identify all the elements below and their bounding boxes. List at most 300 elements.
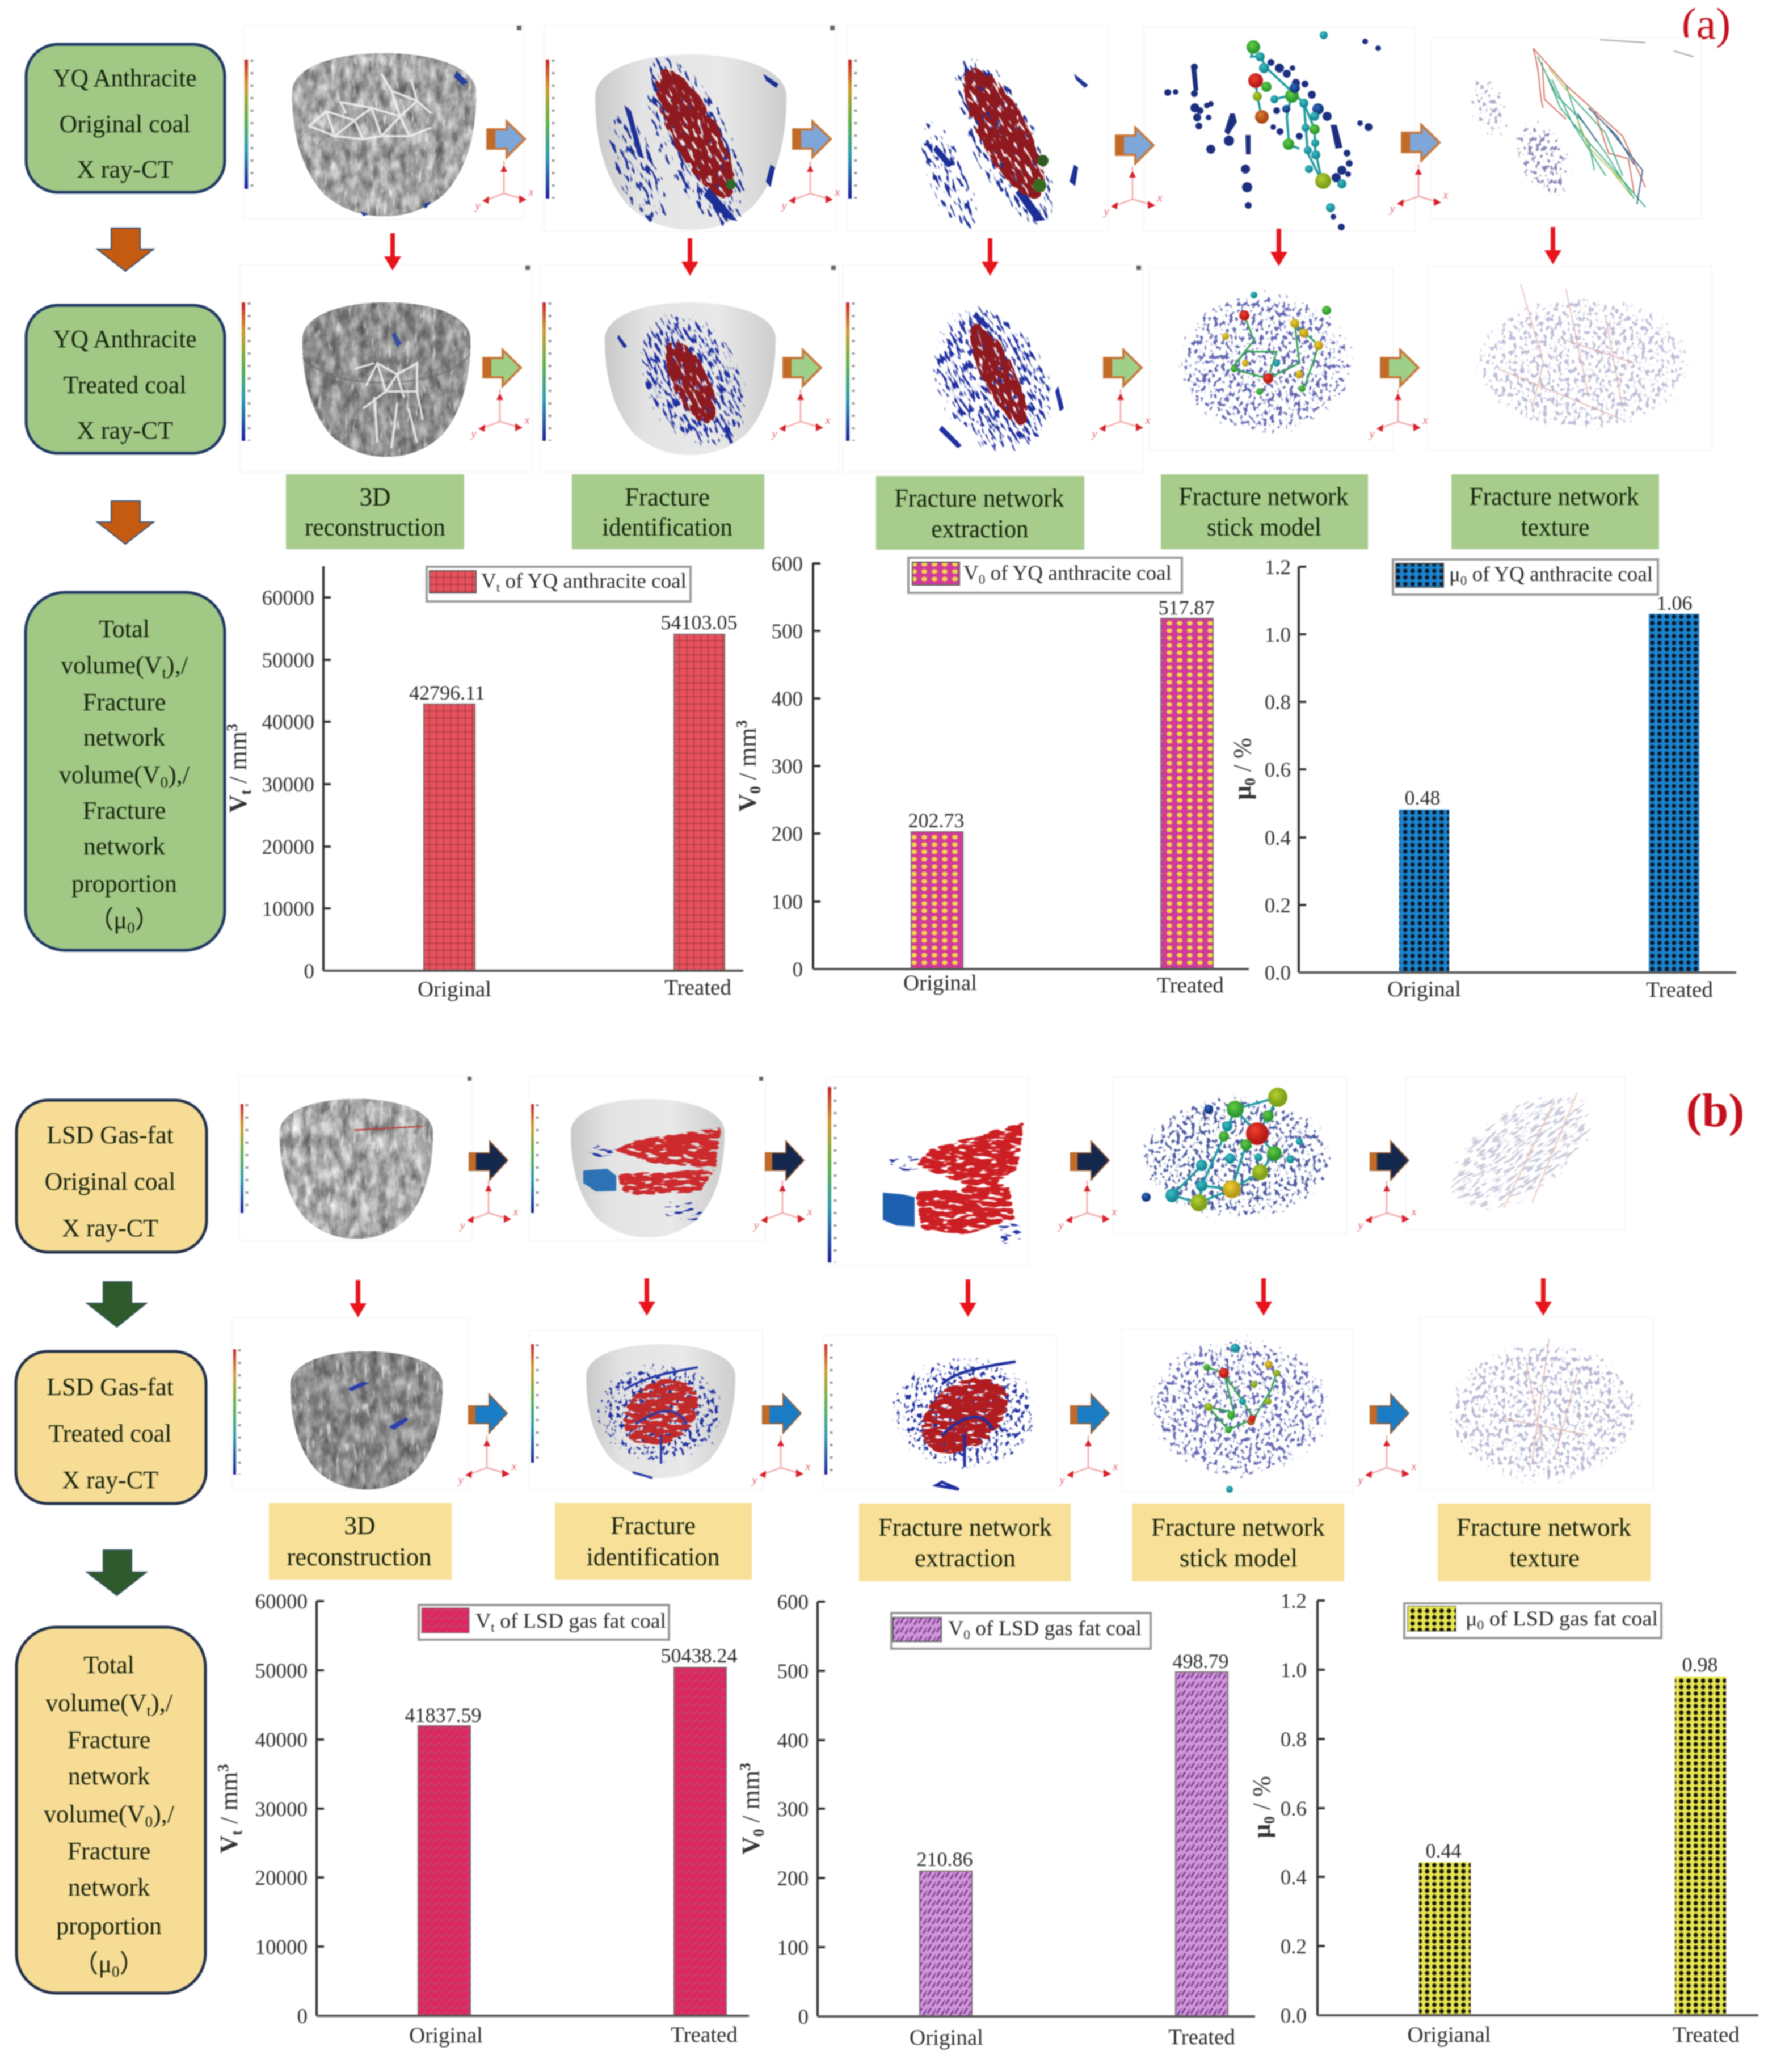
axis title: 0 bbox=[1241, 778, 1258, 786]
arrow: to texture bbox=[1402, 125, 1439, 161]
box: YQ anthracite treated coal: X ray-CT bbox=[77, 416, 173, 444]
legend: V bbox=[475, 1610, 491, 1633]
step label: fracture identification: identification bbox=[587, 1543, 719, 1571]
bar chart: mu0 of LSD gas fat coal: 0.2 bbox=[1281, 1935, 1307, 1959]
step label: fracture identification: Fracture bbox=[611, 1511, 696, 1540]
box: measured parameters: ） bbox=[135, 906, 160, 934]
arrow: flow down to parameters box bbox=[97, 501, 154, 544]
axis triad: x bbox=[825, 414, 831, 427]
axis triad bbox=[457, 1435, 517, 1486]
box: YQ anthracite treated coal: Treated coal bbox=[63, 371, 187, 399]
axis triad: x bbox=[528, 186, 534, 199]
bar chart: Vt of LSD gas fat coal: 30000 bbox=[255, 1798, 308, 1821]
box: LSD gas-fat original coal: Original coal bbox=[45, 1168, 175, 1195]
bar chart: Vt of YQ anthracite coal: Original bbox=[418, 977, 491, 1001]
bar chart: V0 of YQ anthracite coal: 200 bbox=[772, 823, 803, 846]
bar chart: V0 of YQ anthracite coal: 500 bbox=[772, 620, 803, 643]
red arrow: texture bbox=[1544, 227, 1561, 264]
box: measured parameters: t bbox=[146, 1702, 151, 1719]
panel label (a): (a) bbox=[1682, 0, 1731, 48]
axis triad: x bbox=[1112, 1206, 1117, 1218]
image: treated fracture network extraction bbox=[843, 264, 1143, 481]
step label: 3D reconstruction: reconstruction bbox=[287, 1543, 431, 1571]
axis triad bbox=[1059, 1435, 1118, 1486]
arrow: to stick model bbox=[1071, 1141, 1109, 1180]
legend: of LSD gas fat coal bbox=[495, 1610, 666, 1633]
image: original fracture identification bbox=[544, 26, 836, 246]
bar chart: V0 of YQ anthracite coal: 202.73 bbox=[908, 809, 965, 832]
axis triad bbox=[1103, 167, 1163, 218]
axis triad bbox=[474, 161, 534, 212]
axis title: 3 bbox=[736, 1763, 753, 1771]
axis triad: y bbox=[753, 1219, 759, 1232]
bar chart: V0 of YQ anthracite coal: 100 bbox=[772, 891, 803, 914]
bar chart: V0 of YQ anthracite coal: 0 bbox=[792, 958, 803, 982]
arrow: to fracture identification bbox=[469, 1141, 508, 1180]
box: measured parameters bbox=[16, 1627, 205, 1993]
axis triad: y bbox=[781, 200, 787, 212]
axis triad: x bbox=[1113, 1460, 1118, 1473]
axis triad: x bbox=[513, 1206, 519, 1218]
box: measured parameters: （μ bbox=[73, 1950, 112, 1978]
bar chart: Vt of YQ anthracite coal: Treated bbox=[664, 975, 731, 1000]
step label: network extraction: extraction bbox=[932, 515, 1028, 543]
axis title: 0 bbox=[750, 1829, 767, 1837]
bar chart: V0 of LSD gas fat coal: 400 bbox=[777, 1729, 809, 1753]
box: LSD gas-fat treated coal bbox=[16, 1351, 206, 1504]
bar chart: Vt of LSD gas fat coal: 50000 bbox=[255, 1660, 308, 1683]
box: measured parameters: 0 bbox=[160, 774, 168, 791]
bar chart: Vt of YQ anthracite coal: 50000 bbox=[262, 649, 314, 672]
axis title: 3 bbox=[224, 723, 241, 731]
axis triad: y bbox=[1357, 1219, 1363, 1232]
arrow: to fracture identification bbox=[487, 121, 525, 157]
axis triad: y bbox=[751, 1474, 757, 1486]
axis triad: x bbox=[805, 1460, 811, 1473]
box: measured parameters bbox=[26, 592, 225, 950]
arrow: flow down to treated box bbox=[87, 1282, 146, 1327]
legend bbox=[1404, 1603, 1661, 1638]
bar chart: Vt of YQ anthracite coal bbox=[224, 566, 743, 1001]
bar chart: Vt of LSD gas fat coal: 60000 bbox=[255, 1590, 308, 1614]
box: measured parameters: proportion bbox=[56, 1912, 162, 1940]
bar chart: mu0 of YQ anthracite coal: 0.2 bbox=[1265, 894, 1291, 917]
bar chart: mu0 of LSD gas fat coal: 1.0 bbox=[1281, 1659, 1307, 1682]
legend bbox=[891, 1613, 1151, 1649]
step label: network stick model: Fracture network bbox=[1179, 482, 1349, 511]
legend: V bbox=[948, 1617, 963, 1640]
legend: 0 bbox=[1477, 1618, 1484, 1632]
box: measured parameters: Fracture bbox=[83, 688, 166, 716]
bar chart: V0 of YQ anthracite coal: 517.87 bbox=[1159, 596, 1214, 619]
axis title: / mm bbox=[215, 1772, 243, 1830]
bar: treated bbox=[1176, 1672, 1228, 2016]
panel (b): LSD gas-fat coal bbox=[16, 1062, 1758, 2050]
box: measured parameters: t bbox=[162, 664, 166, 681]
axis triad: y bbox=[474, 200, 481, 212]
legend bbox=[427, 567, 691, 601]
axis title: / % bbox=[1248, 1776, 1275, 1816]
axis triad: y bbox=[1357, 1474, 1363, 1486]
step label: network texture: Fracture network bbox=[1470, 482, 1639, 511]
axis triad bbox=[1357, 1435, 1417, 1486]
red arrow: network extraction bbox=[982, 238, 999, 276]
box: YQ anthracite original coal: Original coal bbox=[60, 110, 190, 138]
step label: network texture: texture bbox=[1509, 1544, 1580, 1572]
legend: 0 bbox=[979, 572, 985, 587]
axis triad: y bbox=[1369, 428, 1375, 440]
box: YQ anthracite original coal: YQ Anthracite bbox=[53, 64, 196, 92]
bar chart: mu0 of LSD gas fat coal: 1.2 bbox=[1281, 1590, 1307, 1613]
step label: fracture identification: identification bbox=[602, 513, 732, 541]
bar chart: mu0 of YQ anthracite coal: Original bbox=[1387, 977, 1461, 1001]
image: treated fracture network extraction bbox=[823, 1336, 1056, 1490]
legend: of LSD gas fat coal bbox=[970, 1617, 1142, 1640]
arrow: to network extraction bbox=[763, 1394, 801, 1433]
bar chart: mu0 of YQ anthracite coal: 0.48 bbox=[1405, 786, 1440, 809]
box: LSD gas-fat original coal: LSD Gas-fat bbox=[47, 1121, 174, 1149]
bar chart: Vt of YQ anthracite coal: 40000 bbox=[262, 711, 314, 734]
axis title: V bbox=[215, 1835, 243, 1854]
bar chart: mu0 of YQ anthracite coal: 0.0 bbox=[1265, 962, 1291, 985]
axis title: 3 bbox=[214, 1764, 231, 1772]
bar chart: Vt of YQ anthracite coal: 54103.05 bbox=[660, 611, 738, 634]
axis triad: y bbox=[771, 428, 777, 440]
bar chart: Vt of YQ anthracite coal: 10000 bbox=[262, 898, 314, 921]
bar chart: mu0 of LSD gas fat coal: Origianal bbox=[1407, 2023, 1491, 2047]
bar chart: mu0 of YQ anthracite coal: 0.4 bbox=[1265, 827, 1291, 850]
box: measured parameters: ),/ bbox=[166, 651, 188, 679]
axis triad bbox=[470, 389, 530, 440]
step label: 3D reconstruction: 3D bbox=[360, 483, 390, 511]
arrow: to texture bbox=[1370, 1141, 1409, 1180]
bar chart: mu0 of LSD gas fat coal: 0.8 bbox=[1281, 1728, 1307, 1751]
panel label (b): (b) bbox=[1686, 1084, 1744, 1137]
axis title: V bbox=[734, 794, 761, 812]
axis triad: x bbox=[1443, 189, 1449, 201]
image: original 3D reconstruction bbox=[239, 1076, 472, 1240]
step label: network stick model: Fracture network bbox=[1151, 1513, 1325, 1542]
axis triad: y bbox=[1059, 1474, 1065, 1486]
panel (a): YQ anthracite coal bbox=[26, 0, 1736, 1002]
legend bbox=[908, 558, 1182, 593]
image: treated fracture identification bbox=[529, 1330, 763, 1490]
image: treated fracture identification bbox=[540, 264, 839, 473]
bar: treated bbox=[1161, 618, 1213, 969]
axis triad: y bbox=[459, 1219, 465, 1232]
axis title: V bbox=[224, 795, 252, 813]
bar chart: Vt of YQ anthracite coal: 60000 bbox=[262, 587, 314, 610]
axis triad bbox=[771, 389, 831, 440]
bar chart: V0 of LSD gas fat coal: 500 bbox=[777, 1660, 809, 1683]
box: LSD gas-fat treated coal: X ray-CT bbox=[62, 1466, 158, 1494]
bar chart: mu0 of LSD gas fat coal: 0.6 bbox=[1281, 1797, 1307, 1821]
step label: fracture identification bbox=[572, 474, 764, 549]
image: treated fracture network texture bbox=[1420, 1317, 1653, 1490]
axis title: V bbox=[737, 1837, 765, 1855]
red arrow: 3D reconstruction bbox=[350, 1280, 367, 1317]
bar chart: Vt of YQ anthracite coal: 20000 bbox=[262, 836, 314, 859]
axis triad: x bbox=[511, 1460, 517, 1473]
arrow: to fracture identification bbox=[469, 1394, 507, 1433]
axis title: μ bbox=[1228, 786, 1256, 800]
box: measured parameters: ） bbox=[120, 1950, 145, 1978]
bar chart: V0 of LSD gas fat coal bbox=[736, 1591, 1255, 2050]
axis title: 0 bbox=[1261, 1816, 1278, 1824]
step label: network extraction bbox=[876, 476, 1084, 550]
arrow: to stick model bbox=[1116, 128, 1153, 163]
axis title: μ bbox=[1248, 1824, 1275, 1838]
box: measured parameters: network bbox=[83, 832, 165, 860]
bar chart: mu0 of LSD gas fat coal: 0.0 bbox=[1281, 2004, 1307, 2028]
bar chart: Vt of LSD gas fat coal: 10000 bbox=[255, 1936, 308, 1959]
step label: network texture: Fracture network bbox=[1456, 1513, 1631, 1542]
bar chart: Vt of LSD gas fat coal bbox=[214, 1590, 749, 2048]
step label: 3D reconstruction: 3D bbox=[344, 1511, 376, 1540]
bar: original bbox=[418, 1726, 470, 2016]
box: measured parameters: proportion bbox=[71, 870, 177, 898]
bar chart: V0 of LSD gas fat coal: 100 bbox=[777, 1936, 809, 1960]
red arrow: stick model bbox=[1270, 229, 1287, 266]
axis triad bbox=[753, 1181, 812, 1232]
box: measured parameters: ),/ bbox=[153, 1800, 175, 1828]
box: measured parameters: volume(V bbox=[44, 1800, 145, 1828]
bar chart: V0 of LSD gas fat coal: Original bbox=[910, 2025, 983, 2050]
box: measured parameters: network bbox=[68, 1762, 150, 1790]
bar chart: mu0 of LSD gas fat coal: 0.4 bbox=[1281, 1866, 1307, 1889]
bar chart: Vt of YQ anthracite coal: 42796.11 bbox=[409, 681, 485, 704]
arrow: flow down to parameters box bbox=[87, 1550, 146, 1595]
legend: of YQ anthracite coal bbox=[1467, 563, 1653, 586]
axis title: t bbox=[237, 790, 254, 795]
bar chart: Vt of YQ anthracite coal: 0 bbox=[304, 960, 314, 983]
box: YQ anthracite original coal bbox=[26, 44, 225, 192]
step label: network extraction: Fracture network bbox=[878, 1513, 1052, 1542]
axis triad: x bbox=[1411, 1206, 1417, 1218]
legend: μ bbox=[1466, 1607, 1477, 1631]
image: original fracture network extraction bbox=[847, 26, 1108, 245]
box: measured parameters: Total bbox=[99, 615, 150, 643]
bar: original bbox=[920, 1871, 972, 2016]
arrow: to fracture identification bbox=[483, 350, 521, 386]
box: measured parameters: volume(V bbox=[61, 651, 162, 679]
bar chart: mu0 of YQ anthracite coal: 1.0 bbox=[1265, 624, 1291, 647]
axis title: / % bbox=[1228, 738, 1256, 778]
step label: network texture bbox=[1451, 474, 1659, 549]
axis triad bbox=[751, 1435, 811, 1486]
image: treated fracture network stick model bbox=[1122, 1329, 1353, 1493]
axis triad: y bbox=[1091, 428, 1097, 440]
red arrow: fracture identification bbox=[638, 1278, 655, 1316]
bar chart: V0 of LSD gas fat coal: 0 bbox=[798, 2006, 809, 2029]
arrow: flow down to treated box bbox=[97, 228, 154, 271]
image: original fracture network texture bbox=[1406, 1062, 1625, 1242]
bar: treated bbox=[1675, 1677, 1726, 2015]
bar: original bbox=[911, 832, 963, 969]
red arrow: 3D reconstruction bbox=[384, 233, 401, 271]
axis triad bbox=[459, 1181, 519, 1232]
bar: original bbox=[424, 704, 475, 971]
arrow: to network extraction bbox=[765, 1141, 804, 1180]
arrow: to stick model bbox=[1104, 350, 1142, 386]
step label: network extraction bbox=[859, 1504, 1071, 1581]
red arrow: network extraction bbox=[959, 1279, 976, 1317]
arrow: to network extraction bbox=[793, 121, 831, 157]
arrow: to texture bbox=[1370, 1394, 1409, 1433]
axis triad: y bbox=[1058, 1219, 1064, 1232]
axis title: / mm bbox=[737, 1771, 765, 1829]
arrow: to texture bbox=[1381, 350, 1418, 386]
axis triad bbox=[1389, 164, 1449, 215]
bar chart: Vt of LSD gas fat coal: 40000 bbox=[255, 1729, 308, 1752]
box: measured parameters: ),/ bbox=[168, 761, 190, 789]
bar chart: mu0 of LSD gas fat coal: Treated bbox=[1673, 2023, 1740, 2047]
image: original fracture network stick model bbox=[1144, 27, 1416, 231]
step label: 3D reconstruction: reconstruction bbox=[305, 513, 445, 541]
legend bbox=[1393, 559, 1658, 595]
red arrow: fracture identification bbox=[681, 238, 698, 276]
step label: 3D reconstruction bbox=[286, 474, 464, 549]
image: original fracture network texture bbox=[1432, 38, 1702, 219]
axis title: 0 bbox=[747, 786, 764, 794]
bar chart: Vt of LSD gas fat coal: Original bbox=[409, 2023, 483, 2048]
axis triad: x bbox=[835, 186, 840, 199]
bar chart: V0 of YQ anthracite coal: 600 bbox=[772, 553, 803, 576]
step label: network stick model: stick model bbox=[1207, 513, 1321, 541]
box: YQ anthracite treated coal: YQ Anthracite bbox=[53, 325, 196, 353]
image: treated 3D reconstruction bbox=[240, 264, 533, 472]
axis triad: y bbox=[1389, 203, 1395, 215]
step label: fracture identification: Fracture bbox=[625, 483, 710, 511]
axis title: / mm bbox=[224, 731, 252, 790]
bar chart: mu0 of YQ anthracite coal: 0.6 bbox=[1265, 759, 1291, 782]
axis triad: x bbox=[1145, 414, 1151, 427]
axis triad: y bbox=[457, 1474, 464, 1486]
bar chart: mu0 of YQ anthracite coal: 1.06 bbox=[1657, 592, 1692, 614]
step label: 3D reconstruction bbox=[269, 1503, 452, 1580]
legend: t bbox=[496, 580, 500, 595]
box: measured parameters: volume(V bbox=[45, 1689, 146, 1717]
legend: 0 bbox=[963, 1628, 970, 1642]
bar chart: V0 of LSD gas fat coal: 600 bbox=[777, 1591, 809, 1614]
step label: network extraction: extraction bbox=[915, 1544, 1016, 1572]
bar chart: mu0 of LSD gas fat coal: 0.44 bbox=[1425, 1839, 1462, 1862]
bar chart: V0 of LSD gas fat coal: 498.79 bbox=[1172, 1650, 1229, 1673]
legend: of YQ anthracite coal bbox=[500, 570, 687, 593]
axis triad: x bbox=[1411, 1460, 1417, 1473]
legend: V bbox=[963, 562, 979, 585]
axis triad: y bbox=[1103, 205, 1109, 218]
step label: network stick model bbox=[1161, 474, 1368, 549]
image: original fracture identification bbox=[529, 1076, 765, 1240]
step label: network texture: texture bbox=[1521, 513, 1590, 541]
image: original fracture network stick model bbox=[1113, 1077, 1347, 1233]
box: measured parameters: （μ bbox=[89, 906, 127, 934]
image: treated fracture network texture bbox=[1428, 266, 1712, 450]
box: measured parameters: Fracture bbox=[68, 1726, 150, 1754]
step label: fracture identification bbox=[555, 1503, 752, 1580]
image: treated fracture network stick model bbox=[1149, 268, 1393, 450]
box: measured parameters: network bbox=[83, 723, 165, 751]
axis triad: x bbox=[1157, 192, 1163, 204]
step label: network texture bbox=[1438, 1504, 1651, 1581]
bar chart: mu0 of YQ anthracite coal: 1.2 bbox=[1265, 556, 1291, 579]
axis triad: y bbox=[470, 428, 477, 440]
axis triad: x bbox=[1422, 414, 1428, 427]
bar chart: mu0 of YQ anthracite coal bbox=[1228, 556, 1736, 1002]
bar: treated bbox=[674, 634, 725, 971]
bar chart: mu0 of YQ anthracite coal: Treated bbox=[1646, 978, 1713, 1002]
box: LSD gas-fat original coal: X ray-CT bbox=[62, 1214, 158, 1242]
bar chart: mu0 of YQ anthracite coal: 0.8 bbox=[1265, 691, 1291, 714]
box: measured parameters: Fracture bbox=[68, 1837, 150, 1865]
legend: 0 bbox=[1460, 574, 1467, 588]
axis triad bbox=[1058, 1181, 1117, 1232]
axis triad: x bbox=[807, 1206, 812, 1218]
bar chart: Vt of YQ anthracite coal: 30000 bbox=[262, 773, 314, 797]
box: YQ anthracite original coal: X ray-CT bbox=[77, 155, 173, 183]
step label: network stick model bbox=[1132, 1504, 1344, 1581]
axis title: / mm bbox=[734, 728, 761, 786]
arrow: to stick model bbox=[1071, 1394, 1109, 1433]
box: LSD gas-fat treated coal: LSD Gas-fat bbox=[47, 1373, 174, 1401]
bar chart: V0 of LSD gas fat coal: Treated bbox=[1168, 2025, 1235, 2049]
box: LSD gas-fat treated coal: Treated coal bbox=[48, 1420, 172, 1447]
step label: network extraction: Fracture network bbox=[894, 484, 1064, 512]
axis title: 3 bbox=[733, 720, 750, 728]
bar chart: V0 of LSD gas fat coal: 210.86 bbox=[917, 1848, 973, 1871]
legend: of YQ anthracite coal bbox=[985, 562, 1172, 585]
legend bbox=[419, 1605, 669, 1640]
image: original fracture network extraction bbox=[826, 1077, 1028, 1266]
box: measured parameters: network bbox=[68, 1873, 150, 1901]
legend: V bbox=[481, 570, 496, 593]
bar chart: Vt of LSD gas fat coal: 41837.59 bbox=[405, 1704, 481, 1726]
red arrow: stick model bbox=[1255, 1278, 1272, 1316]
axis triad bbox=[1357, 1181, 1417, 1232]
axis triad bbox=[781, 161, 840, 212]
step label: network stick model: stick model bbox=[1180, 1544, 1298, 1572]
bar chart: V0 of LSD gas fat coal: 300 bbox=[777, 1798, 809, 1821]
box: measured parameters: 0 bbox=[112, 1963, 120, 1980]
image: treated 3D reconstruction bbox=[232, 1317, 468, 1490]
bar: treated bbox=[674, 1667, 726, 2016]
axis triad: x bbox=[524, 414, 530, 427]
legend: μ bbox=[1449, 563, 1460, 586]
axis triad bbox=[1091, 389, 1151, 440]
bar chart: V0 of YQ anthracite coal: 400 bbox=[772, 688, 803, 711]
legend: t bbox=[491, 1620, 495, 1635]
image: original 3D reconstruction bbox=[243, 26, 524, 219]
arrow: to network extraction bbox=[784, 350, 821, 386]
bar chart: mu0 of LSD gas fat coal bbox=[1248, 1590, 1758, 2047]
axis title: t bbox=[228, 1830, 245, 1835]
box: measured parameters: Fracture bbox=[83, 797, 166, 824]
bar chart: Vt of LSD gas fat coal: Treated bbox=[671, 2023, 738, 2047]
box: measured parameters: volume(V bbox=[59, 761, 160, 789]
box: LSD gas-fat original coal bbox=[16, 1100, 207, 1252]
box: measured parameters: ),/ bbox=[151, 1689, 173, 1717]
box: measured parameters: Total bbox=[83, 1651, 134, 1679]
bar: original bbox=[1399, 810, 1449, 972]
bar chart: V0 of YQ anthracite coal: Original bbox=[903, 971, 977, 995]
bar chart: V0 of YQ anthracite coal: 300 bbox=[772, 755, 803, 778]
bar chart: Vt of LSD gas fat coal: 0 bbox=[297, 2005, 308, 2028]
bar chart: mu0 of LSD gas fat coal: 0.98 bbox=[1682, 1653, 1718, 1676]
bar chart: Vt of LSD gas fat coal: 20000 bbox=[255, 1867, 308, 1890]
bar chart: V0 of YQ anthracite coal: Treated bbox=[1157, 973, 1224, 997]
bar chart: Vt of LSD gas fat coal: 50438.24 bbox=[660, 1644, 738, 1667]
